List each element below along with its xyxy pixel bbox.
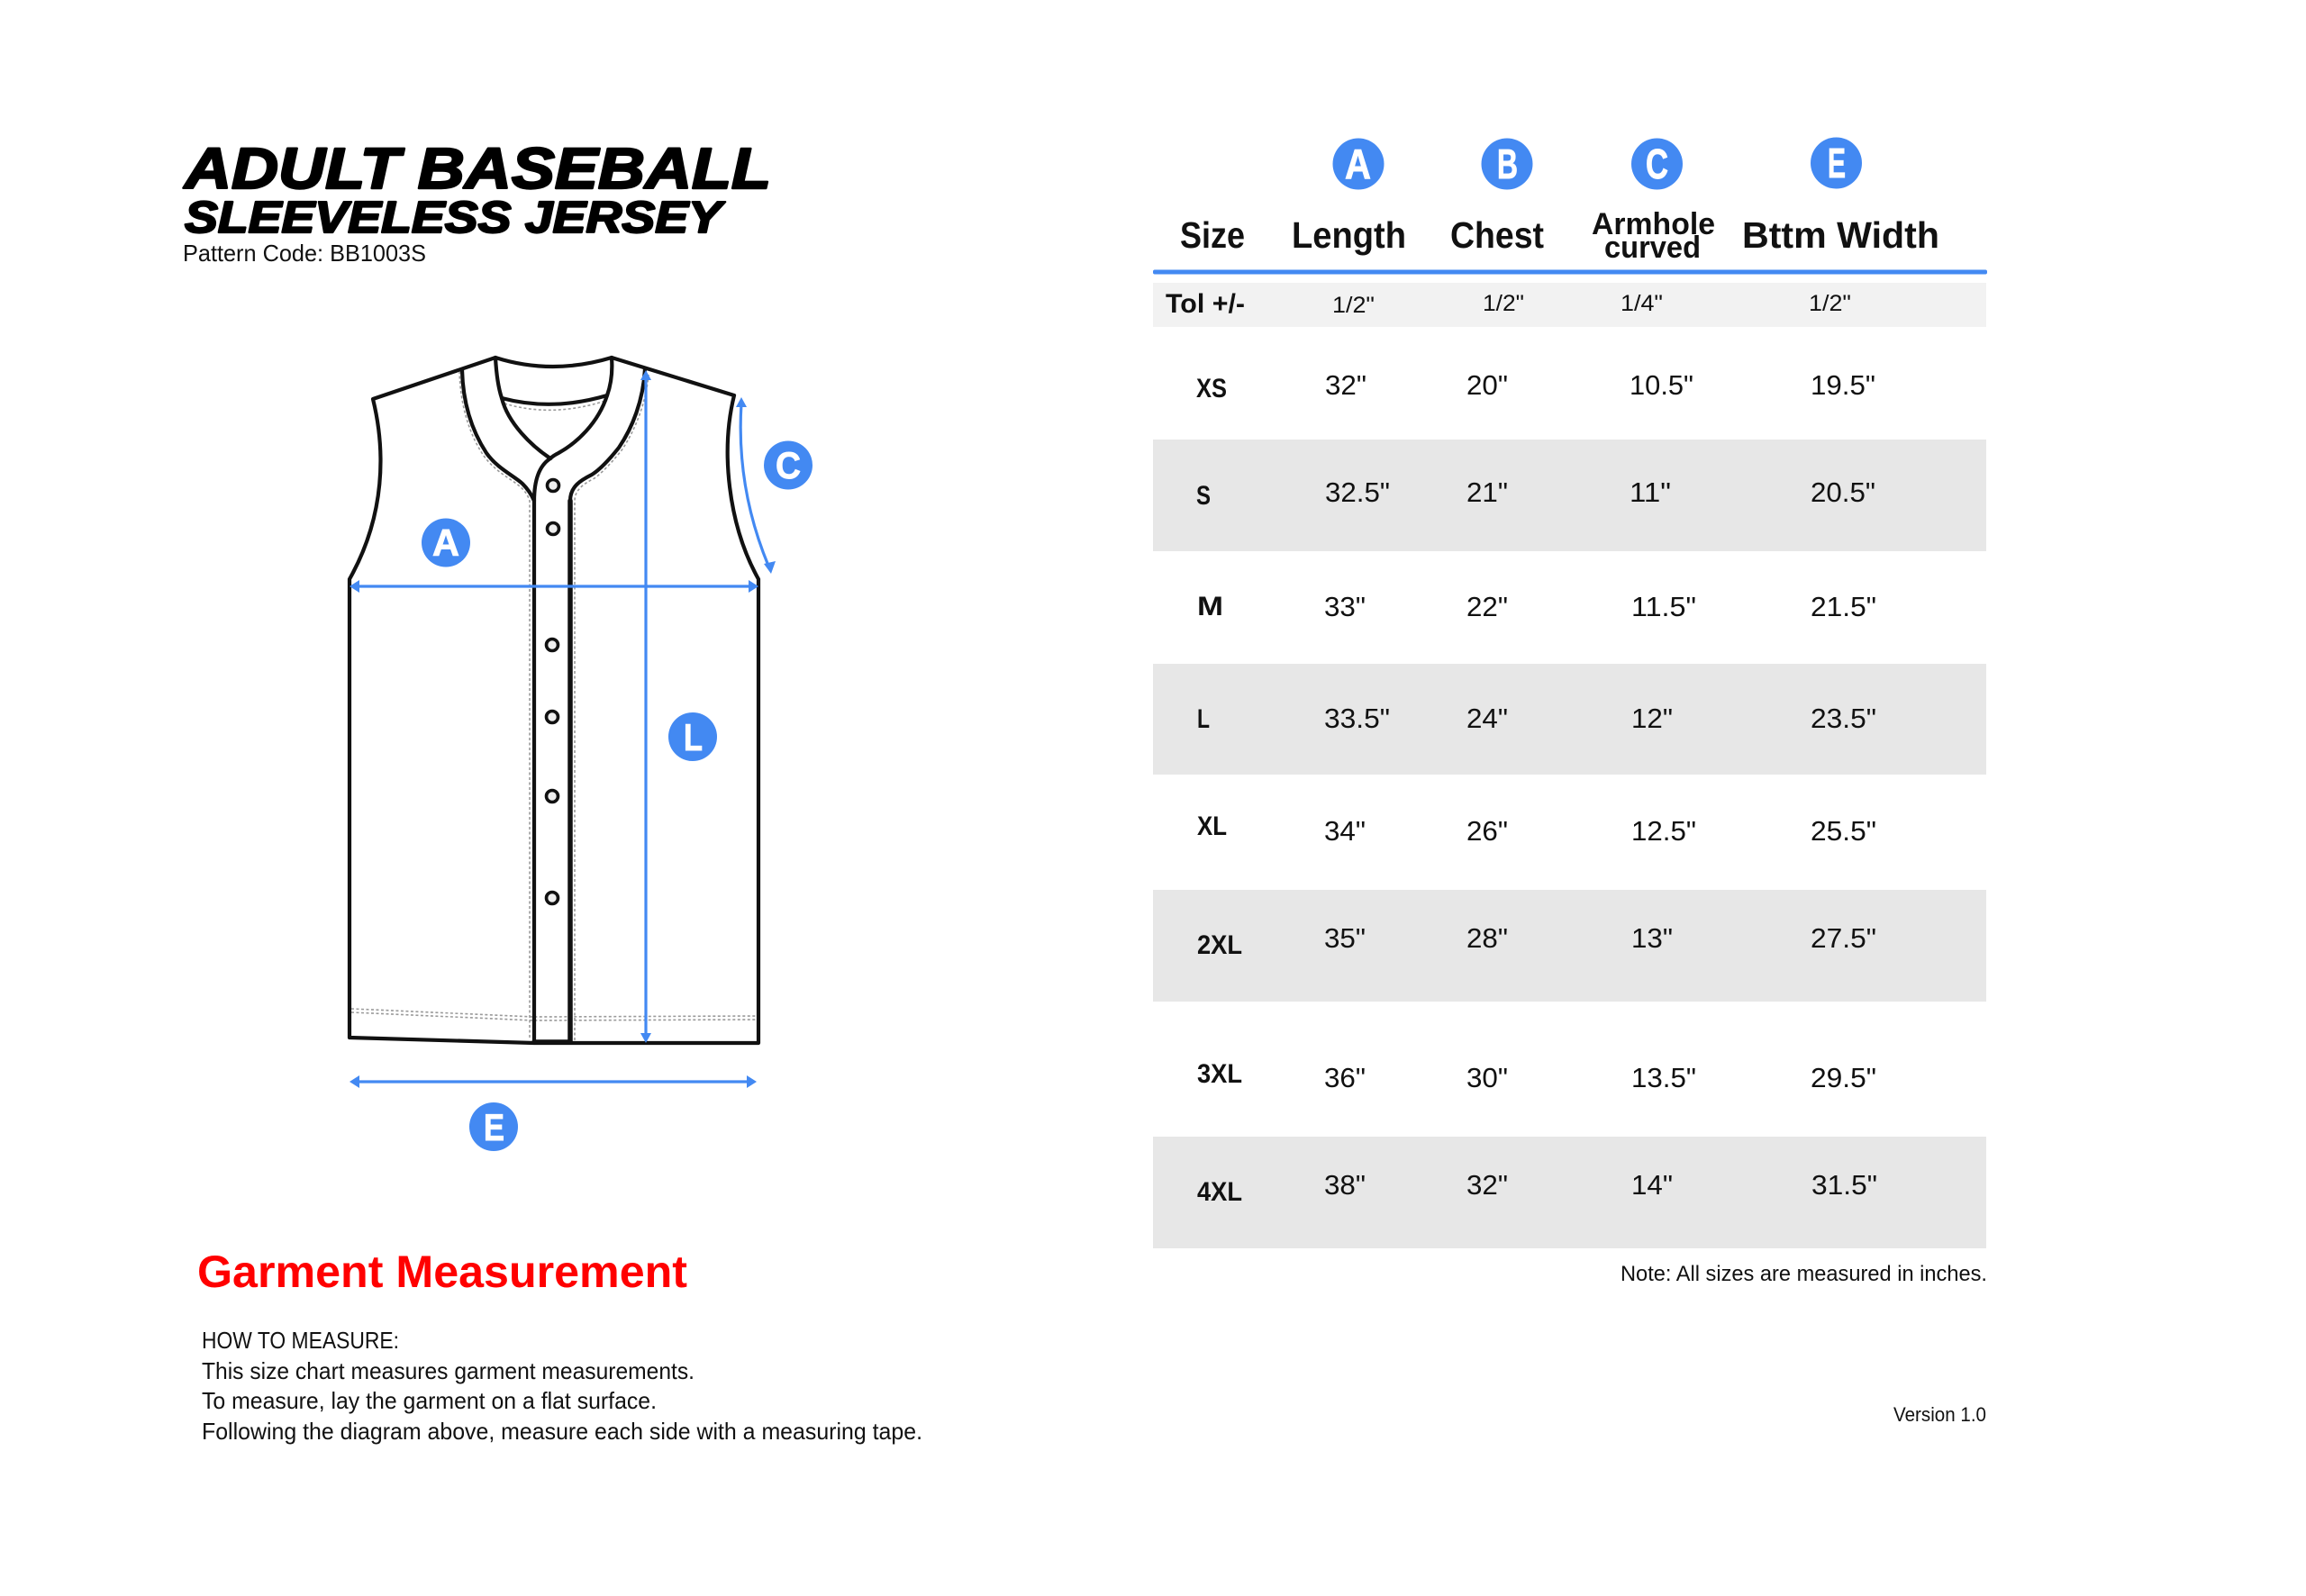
row M: 11.5" xyxy=(1631,591,1696,622)
column badges xyxy=(1333,137,1862,189)
row M: 33" xyxy=(1324,591,1366,622)
row S: 32.5" xyxy=(1325,476,1390,508)
badge: C: C xyxy=(776,444,801,486)
row 3XL xyxy=(1197,1059,1876,1093)
column headers: curved xyxy=(1604,231,1701,265)
jersey outline xyxy=(350,358,758,1043)
column badges: C xyxy=(1646,141,1668,187)
tolerance row: 1/4" xyxy=(1621,291,1663,316)
row M: 21.5" xyxy=(1811,591,1876,622)
version: Version 1.0 xyxy=(1893,1403,1986,1426)
row XL: XL xyxy=(1197,812,1227,841)
row L: L xyxy=(1197,704,1210,734)
row XS: 20" xyxy=(1466,369,1508,401)
column headers: Length xyxy=(1292,214,1406,256)
badge: E xyxy=(469,1102,518,1151)
row XS: 32" xyxy=(1325,369,1366,401)
row S: 11" xyxy=(1630,476,1671,508)
badge: L: L xyxy=(684,716,703,758)
badge: C xyxy=(764,441,813,490)
badge: A: A xyxy=(432,521,459,564)
row L: 24" xyxy=(1466,703,1508,734)
row S xyxy=(1196,476,1875,511)
row 2XL: 35" xyxy=(1324,922,1366,954)
row XL: 34" xyxy=(1324,815,1366,847)
row L: 33.5" xyxy=(1324,703,1390,734)
column headers: Chest xyxy=(1450,214,1544,256)
title: adult baseball: ADULT BASEBALL xyxy=(183,136,771,201)
row 2XL: 2XL xyxy=(1197,930,1242,960)
row S: S xyxy=(1196,481,1211,511)
how to measure text: To measure, lay the garment on a flat surface. xyxy=(202,1387,657,1414)
row S: 21" xyxy=(1466,476,1508,508)
column headers: Armhole xyxy=(1592,207,1715,241)
row 4XL: 38" xyxy=(1324,1169,1366,1201)
buttons xyxy=(546,479,558,904)
row S: 20.5" xyxy=(1811,476,1875,508)
row 3XL: 36" xyxy=(1324,1062,1366,1093)
row 4XL xyxy=(1197,1169,1877,1207)
row L: 23.5" xyxy=(1811,703,1876,734)
row XS: 10.5" xyxy=(1630,369,1693,401)
row 3XL: 30" xyxy=(1466,1062,1508,1093)
row 4XL: 4XL xyxy=(1197,1177,1242,1207)
row XS xyxy=(1196,369,1875,404)
row 4XL: 32" xyxy=(1466,1169,1508,1201)
badge: E: E xyxy=(484,1106,504,1148)
column badges: E xyxy=(1828,140,1846,186)
row XL: 25.5" xyxy=(1811,815,1876,847)
arrow: L length xyxy=(640,370,651,1043)
note: Note: All sizes are measured in inches. xyxy=(1621,1262,1987,1286)
title block xyxy=(183,136,771,267)
how to measure text: This size chart measures garment measurements. xyxy=(202,1357,695,1384)
tolerance row xyxy=(1166,289,1851,319)
row XS: 19.5" xyxy=(1811,369,1875,401)
row L xyxy=(1197,703,1876,734)
row 3XL: 13.5" xyxy=(1631,1062,1696,1093)
row 2XL: 28" xyxy=(1466,922,1508,954)
size chart table xyxy=(1153,137,1987,1248)
column headers: Size xyxy=(1180,214,1245,256)
row XS: XS xyxy=(1196,374,1227,404)
column badges: B xyxy=(1497,141,1518,187)
header rule xyxy=(1153,270,1987,274)
row L: 12" xyxy=(1631,703,1673,734)
row 3XL: 29.5" xyxy=(1811,1062,1876,1093)
tolerance row: Tol +/- xyxy=(1166,289,1245,319)
row 2XL xyxy=(1197,922,1876,960)
row 2XL: 13" xyxy=(1631,922,1673,954)
row 2XL: 27.5" xyxy=(1811,922,1876,954)
how to measure text: Following the diagram above, measure each side with a measuring tape. xyxy=(202,1418,922,1445)
column badges: A xyxy=(1345,141,1371,187)
jersey stitching xyxy=(351,371,758,1040)
row XL: 26" xyxy=(1466,815,1508,847)
row 4XL: 14" xyxy=(1631,1169,1673,1201)
row backgrounds xyxy=(1153,283,1986,1248)
arrow: C armhole curve xyxy=(736,397,776,574)
neckline and collar xyxy=(462,358,645,501)
arrow: E bottom width xyxy=(350,1075,757,1088)
row M xyxy=(1197,591,1876,622)
how to measure text xyxy=(202,1327,922,1445)
row 4XL: 31.5" xyxy=(1811,1169,1877,1201)
row M: 22" xyxy=(1466,591,1508,622)
heading: garment measurement: Garment Measurement xyxy=(197,1247,687,1297)
tolerance row: 1/2" xyxy=(1332,293,1375,318)
column headers xyxy=(1180,207,1939,265)
arrow: A chest width xyxy=(350,580,758,593)
row 3XL: 3XL xyxy=(1197,1059,1242,1089)
row XL: 12.5" xyxy=(1631,815,1696,847)
subtitle: sleeveless jersey: SLEEVELESS JERSEY xyxy=(185,194,726,242)
jersey diagram xyxy=(350,358,813,1151)
column headers: Bttm Width xyxy=(1742,214,1939,256)
badge: A xyxy=(422,519,470,567)
tolerance row: 1/2" xyxy=(1809,291,1851,316)
button placket xyxy=(534,458,570,1042)
tolerance row: 1/2" xyxy=(1483,291,1524,316)
how to measure text: HOW TO MEASURE: xyxy=(202,1327,399,1354)
pattern code: Pattern Code: BB1003S xyxy=(183,240,426,267)
row XL xyxy=(1197,812,1876,847)
row M: M xyxy=(1197,592,1223,621)
badge: L xyxy=(668,712,717,761)
